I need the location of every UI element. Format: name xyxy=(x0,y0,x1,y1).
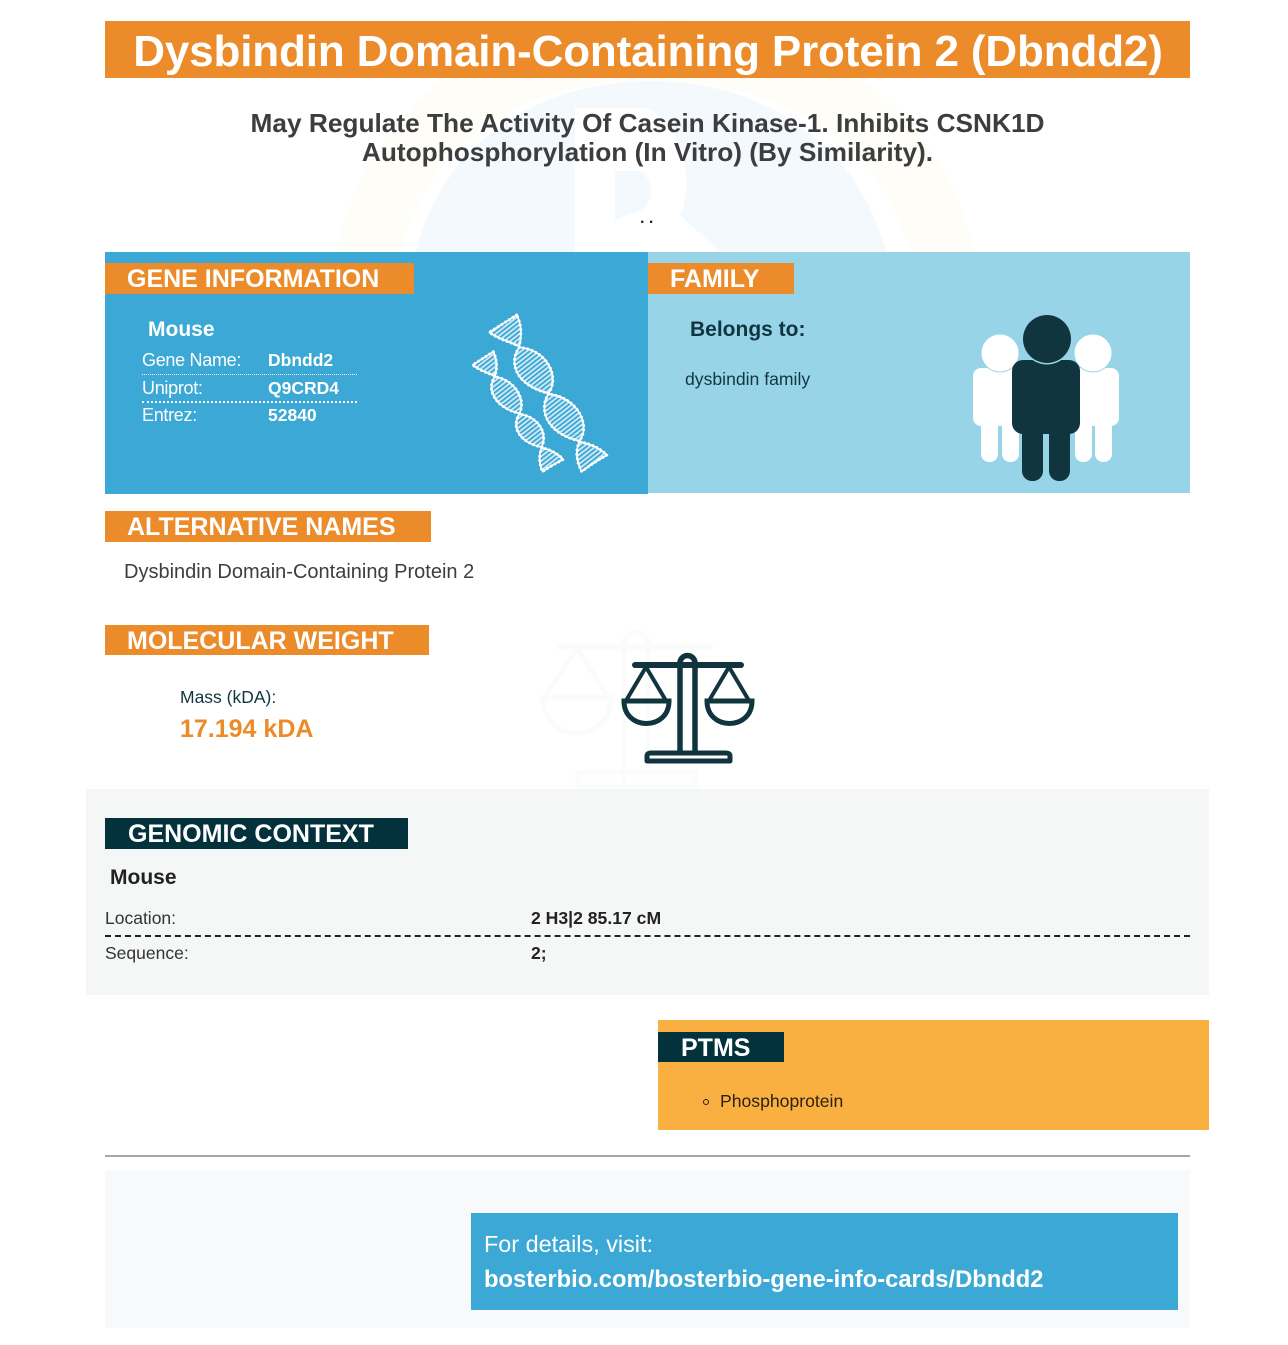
row: gene name: Gene Name: xyxy=(142,350,241,370)
row: location: Location: xyxy=(105,908,176,928)
PTM bullet xyxy=(703,1099,709,1105)
panel: genomic context xyxy=(86,789,1209,995)
visit label: For details, visit: xyxy=(484,1231,653,1257)
row: location: 2 H3|2 85.17 cM xyxy=(531,908,661,928)
family name: dysbindin family xyxy=(685,369,810,389)
mass value: 17.194 kDA xyxy=(180,715,313,743)
alternative names text: Dysbindin Domain-Containing Protein 2 xyxy=(124,561,474,583)
row: uniprot xyxy=(142,375,357,403)
row: gene name xyxy=(142,347,357,375)
species label: Mouse xyxy=(148,318,215,341)
row: entrez xyxy=(142,405,317,425)
gene details table xyxy=(142,350,357,425)
URL: bosterbio.com/bosterbio-gene-info-cards/Dbndd2 xyxy=(484,1266,1043,1293)
row: location xyxy=(105,904,1190,937)
species label: Mouse xyxy=(110,866,177,889)
icon: group of people xyxy=(973,315,1119,481)
row: entrez: 52840 xyxy=(268,405,317,425)
callout: details link xyxy=(471,1213,1178,1310)
panel: footer xyxy=(105,1170,1190,1328)
subtitle description xyxy=(250,108,1044,167)
panel: family xyxy=(648,252,1190,493)
watermark logo xyxy=(416,81,886,252)
subtitle description: May Regulate The Activity Of Casein Kinase-1. Inhibits CSNK1D xyxy=(250,108,1044,138)
divider rule xyxy=(105,1155,1190,1157)
row: uniprot: Q9CRD4 xyxy=(268,378,339,398)
heading: gene information: GENE INFORMATION xyxy=(127,265,379,293)
panel: gene information xyxy=(105,252,648,494)
icon: ghost scale xyxy=(0,0,1288,789)
mass label: Mass (kDA): xyxy=(180,687,276,707)
small dots: . . xyxy=(640,210,653,227)
heading: PTMs xyxy=(658,1032,784,1062)
heading: family xyxy=(648,263,794,294)
row: sequence: 2; xyxy=(531,943,547,963)
row: uniprot: Uniprot: xyxy=(142,378,203,398)
heading: PTMs: PTMS xyxy=(681,1034,750,1062)
subtitle description: Autophosphorylation (In Vitro) (By Similarity). xyxy=(362,137,933,167)
heading: alternative names: ALTERNATIVE NAMES xyxy=(127,513,396,541)
title banner: Dysbindin Domain-Containing Protein 2 (Dbndd2) xyxy=(133,27,1163,76)
heading: family: FAMILY xyxy=(670,265,759,293)
row: gene name: Dbndd2 xyxy=(268,350,333,370)
row: sequence: Sequence: xyxy=(105,943,189,963)
row: sequence xyxy=(105,943,547,963)
heading: genomic context: GENOMIC CONTEXT xyxy=(128,820,374,848)
PTM item: Phosphoprotein xyxy=(720,1091,843,1111)
icon: balance scale xyxy=(622,652,754,764)
panel: PTMs xyxy=(658,1020,1209,1130)
belongs to label: Belongs to: xyxy=(690,318,806,341)
heading: molecular weight: MOLECULAR WEIGHT xyxy=(127,627,394,655)
icon: DNA helices xyxy=(472,313,608,473)
row: entrez: Entrez: xyxy=(142,405,197,425)
